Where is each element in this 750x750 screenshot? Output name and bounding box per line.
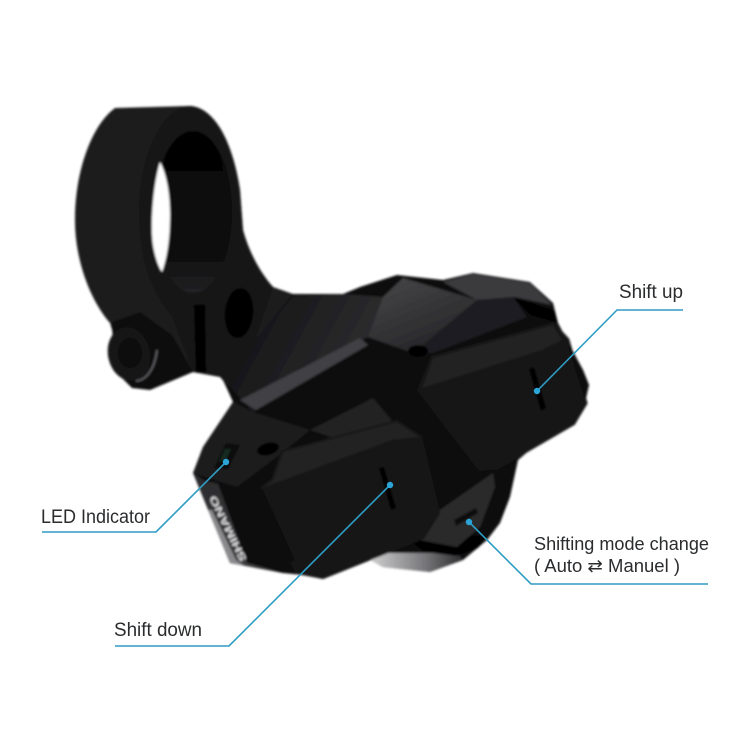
- callout: LED Indicator: LED Indicator: [41, 507, 151, 528]
- callout: Shift up: [534, 282, 683, 394]
- shift down paddle: [259, 422, 438, 577]
- callout: Shifting mode change: [466, 519, 709, 584]
- clamp bore: [154, 131, 232, 293]
- rear housing: [443, 274, 552, 305]
- product: handlebar shifter photo: [75, 106, 589, 577]
- callout: Shift down: Shift down: [114, 620, 202, 641]
- rear black notch: [513, 297, 558, 323]
- clamp ring: [75, 106, 360, 412]
- mount slot hole: [223, 287, 255, 339]
- LED indicator: [219, 449, 231, 462]
- centre screw recess: [408, 345, 428, 357]
- left edge band: [193, 473, 283, 573]
- callout: Shift down: [114, 482, 393, 646]
- raised top: [368, 278, 477, 353]
- clamp slot: [194, 305, 206, 372]
- clamp front face: [139, 106, 273, 377]
- LED recess: [214, 443, 240, 469]
- callout: Shifting mode change: Shifting mode change: [534, 533, 709, 554]
- shift up paddle: [420, 325, 589, 468]
- bore opening: [152, 162, 170, 272]
- lower silver edge: [367, 553, 463, 572]
- body: [193, 273, 589, 577]
- callout: Shift up: Shift up: [619, 282, 683, 303]
- rear notch surface: [413, 297, 527, 353]
- upper arm surface: [222, 294, 383, 412]
- clamp bolt: [103, 312, 193, 390]
- SHIMANO logo: SHIMANO: [208, 493, 249, 563]
- callout: Shifting mode change: ( Auto ⇄ Manuel ): [534, 555, 680, 576]
- screw recess: [256, 440, 280, 458]
- mode button: [454, 508, 478, 526]
- arm highlight strip: [240, 338, 368, 410]
- lower dark lip: [405, 535, 487, 556]
- mode switch housing: [420, 473, 495, 547]
- paddle rear block: [310, 398, 393, 440]
- edge highlight: [208, 510, 245, 566]
- callout: LED Indicator: [41, 459, 229, 532]
- left top surface: [193, 402, 310, 487]
